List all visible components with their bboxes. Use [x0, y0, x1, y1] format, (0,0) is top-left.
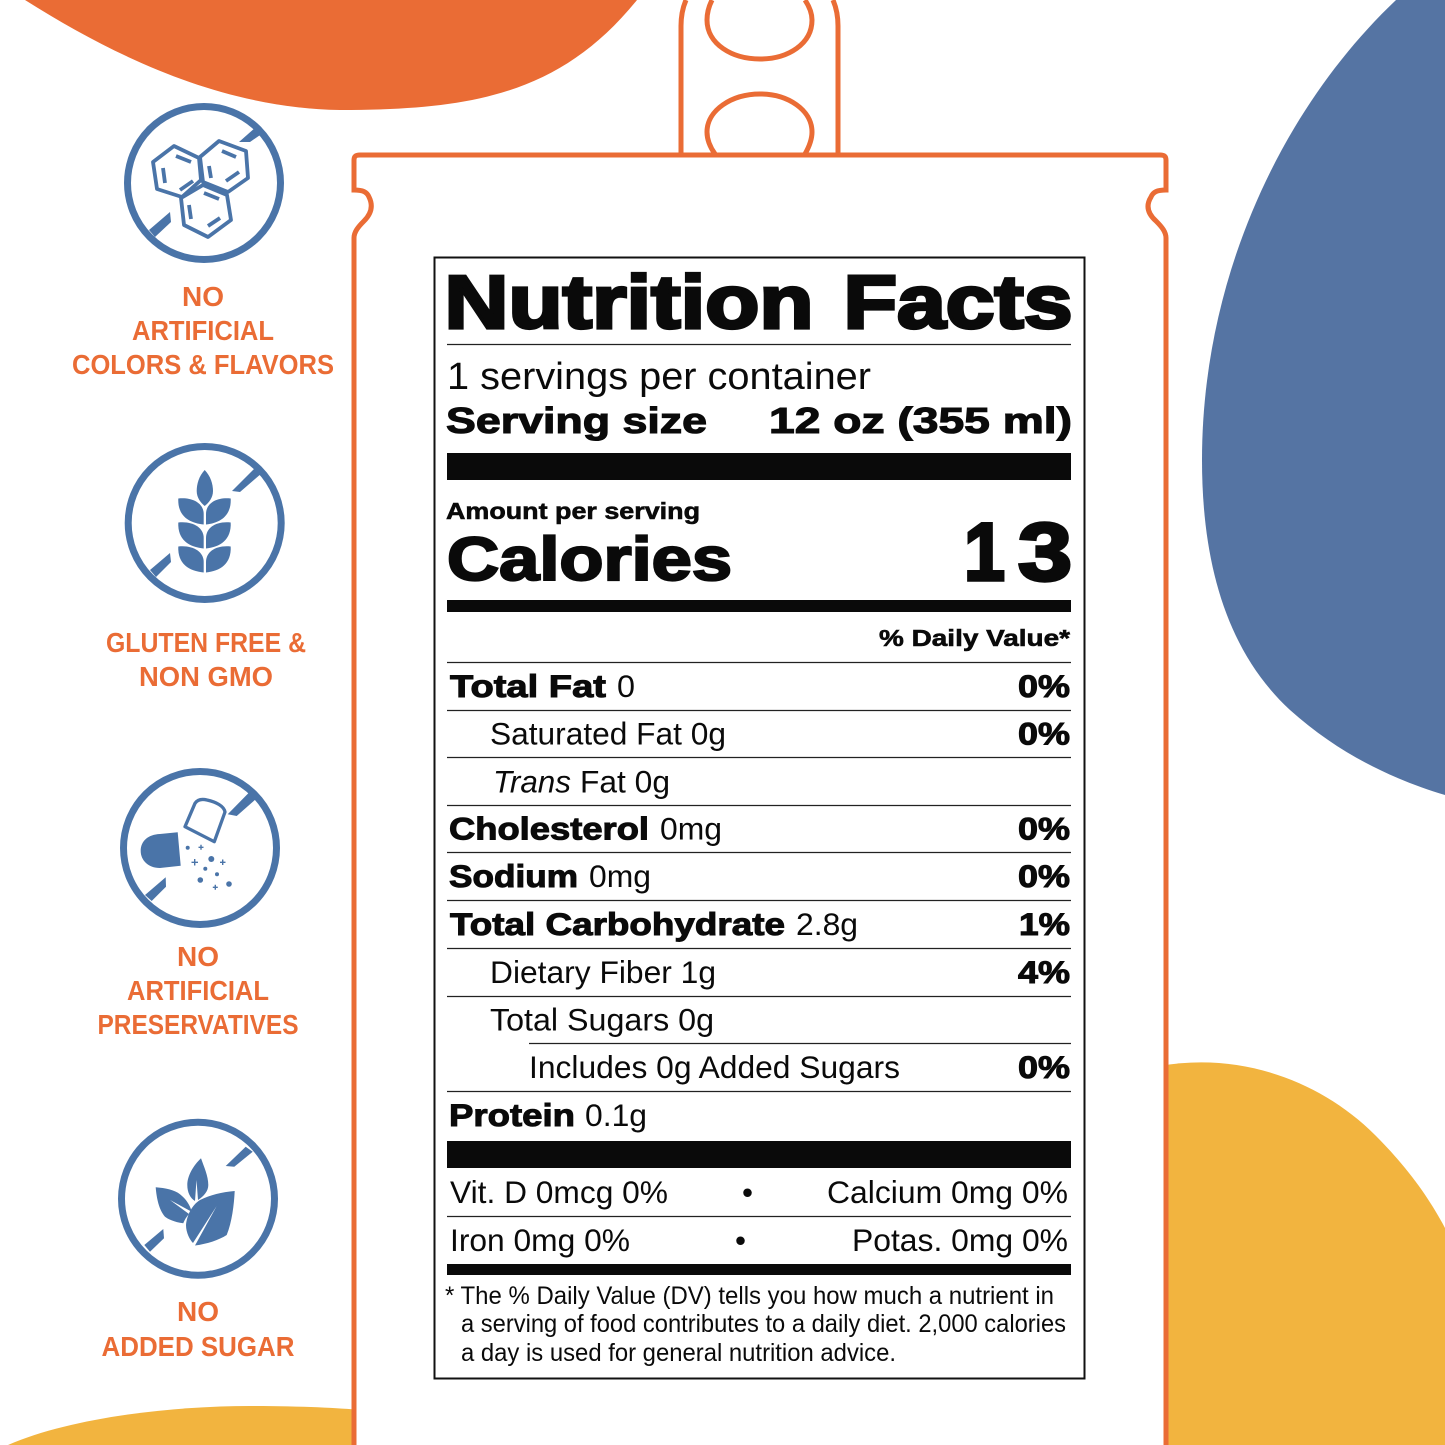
row: cholesterol: 0%	[1018, 810, 1070, 846]
row: protein: 0.1g	[585, 1097, 647, 1133]
divider lines	[447, 662, 1071, 1216]
calories value	[964, 507, 1072, 598]
row: total fat	[450, 668, 1070, 704]
label: no artificial colors: NO	[182, 281, 224, 312]
blue background blob	[1202, 0, 1445, 795]
daily value heading: % Daily Value*	[879, 625, 1071, 651]
row: trans fat: Fat 0g	[580, 764, 670, 800]
row: protein	[449, 1097, 647, 1133]
serving size: Serving size	[446, 400, 707, 441]
particles	[186, 845, 232, 890]
row: cholesterol: 0mg	[660, 810, 722, 846]
row: saturated fat: 0%	[1018, 716, 1070, 752]
row: trans fat: Trans	[493, 764, 571, 800]
label: gluten free: NON GMO	[139, 661, 273, 692]
capsule	[141, 832, 181, 868]
label: no added sugar	[102, 1296, 294, 1362]
nutrition facts label	[434, 258, 1084, 1378]
row: added sugars: 0%	[1018, 1049, 1070, 1085]
calories value: 3	[1018, 507, 1072, 598]
label border	[434, 258, 1084, 1378]
calories: Calories	[447, 525, 732, 593]
row: cholesterol: Cholesterol	[449, 810, 649, 846]
row: sodium: 0%	[1018, 858, 1070, 894]
row: added sugars: Includes 0g Added Sugars	[529, 1049, 900, 1085]
lower hanger hole	[707, 94, 812, 154]
label: no preservatives: ARTIFICIAL	[127, 975, 269, 1006]
label: gluten free: GLUTEN FREE &	[106, 627, 306, 658]
molecule	[153, 141, 248, 237]
footnote: a day is used for general nutrition advice.	[461, 1339, 896, 1367]
serving size	[446, 400, 1072, 441]
row: dietary fiber	[490, 954, 1070, 990]
amount per serving: Amount per serving	[446, 498, 700, 524]
vitamins row 1: Calcium 0mg 0%	[827, 1174, 1068, 1210]
pouch outline	[354, 155, 1166, 1445]
footnote	[445, 1282, 1066, 1367]
row: total fat: Total Fat	[450, 668, 607, 704]
vitamins row 2: Iron 0mg 0%	[450, 1222, 630, 1258]
row: total sugars: Total Sugars 0g	[490, 1002, 714, 1038]
title: Facts	[844, 260, 1072, 344]
row: dietary fiber: 4%	[1018, 954, 1070, 990]
orange background blob	[25, 0, 637, 110]
row: total fat: 0%	[1018, 668, 1070, 704]
title	[444, 260, 1072, 344]
vitamins row 1	[450, 1174, 1068, 1210]
footnote: * The % Daily Value (DV) tells you how much a nutrient in	[445, 1282, 1054, 1310]
row: total fat: 0	[617, 668, 635, 704]
row: sodium: 0mg	[589, 858, 651, 894]
vitamins row 2: Potas. 0mg 0%	[852, 1222, 1068, 1258]
icon: no artificial colors	[128, 106, 280, 260]
vitamins row 1: Vit. D 0mcg 0%	[450, 1174, 668, 1210]
title: Nutrition	[444, 260, 814, 344]
vitamins row 2: •	[735, 1222, 746, 1258]
serving size: 12 oz (355 ml)	[769, 400, 1072, 441]
row: saturated fat	[490, 716, 1070, 752]
row: cholesterol	[449, 810, 1070, 846]
label: no added sugar: ADDED SUGAR	[102, 1331, 294, 1362]
row: total carbohydrate	[450, 906, 1070, 942]
wheat	[178, 470, 231, 572]
label: no preservatives: NO	[177, 941, 219, 972]
vitamins row 1: •	[742, 1174, 753, 1210]
row: protein: Protein	[449, 1097, 575, 1133]
row: dietary fiber: Dietary Fiber 1g	[490, 954, 716, 990]
footnote: a serving of food contributes to a daily diet. 2,000 calories	[461, 1310, 1066, 1338]
row: saturated fat: Saturated Fat 0g	[490, 716, 726, 752]
label: gluten free	[106, 627, 306, 692]
row: total carbohydrate: 1%	[1019, 906, 1070, 942]
label: no added sugar: NO	[177, 1296, 219, 1327]
yellow background blob left	[8, 1406, 360, 1445]
upper hanger hole	[707, 0, 812, 59]
label: no preservatives	[98, 941, 298, 1040]
leaves	[156, 1158, 235, 1246]
pouch hanger tab	[681, 0, 838, 156]
label: no artificial colors: COLORS & FLAVORS	[72, 349, 334, 380]
label: no preservatives: PRESERVATIVES	[98, 1009, 298, 1040]
row: sodium: Sodium	[449, 858, 578, 894]
label: no artificial colors	[72, 281, 334, 380]
row: total carbohydrate: Total Carbohydrate	[450, 906, 785, 942]
icon: no added sugar	[122, 1122, 274, 1275]
row: sodium	[449, 858, 1070, 894]
row: total carbohydrate: 2.8g	[796, 906, 858, 942]
icon: gluten free	[128, 446, 281, 600]
icon: no preservatives	[124, 772, 276, 924]
row: trans fat	[493, 764, 670, 800]
yellow background blob right	[1160, 1062, 1445, 1445]
label: no artificial colors: ARTIFICIAL	[132, 315, 274, 346]
servings: 1 servings per container	[447, 356, 871, 398]
calories value: 1	[964, 507, 1005, 598]
row: added sugars	[529, 1049, 1070, 1085]
vitamins row 2	[450, 1222, 1068, 1258]
